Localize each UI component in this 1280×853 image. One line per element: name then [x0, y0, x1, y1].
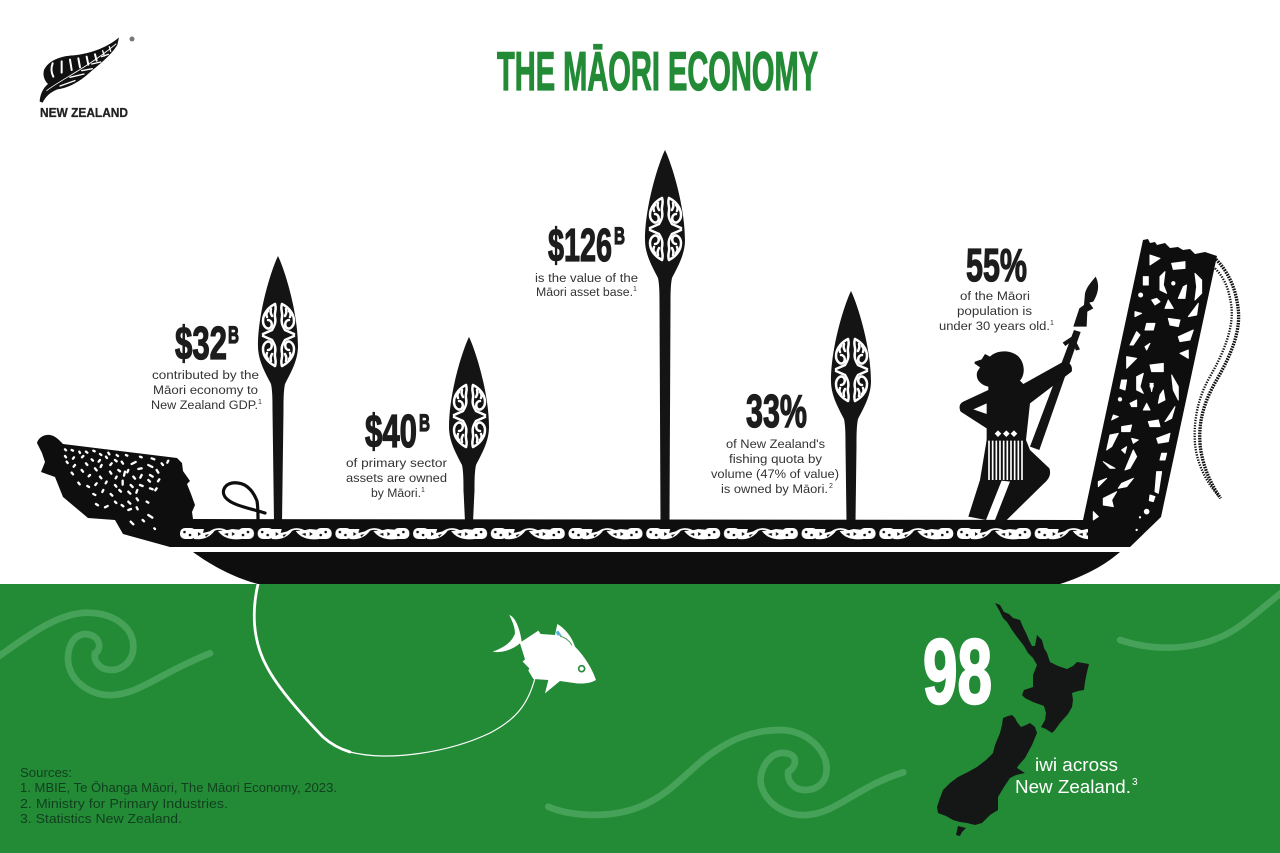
- rope loop: [223, 483, 265, 520]
- stat: $32B: New Zealand GDP.: [151, 398, 258, 412]
- stat: 55%: 1: [1050, 320, 1054, 327]
- stat: 33%: 2: [829, 483, 833, 490]
- sources: 2. Ministry for Primary Industries.: [20, 796, 228, 811]
- stat: $126B: B: [614, 223, 625, 250]
- stat: 33%: 33%: [746, 385, 807, 437]
- registered mark: [130, 36, 134, 42]
- icon: silver fern: [40, 37, 119, 103]
- paddle 2: [449, 337, 489, 522]
- icon: fish: [493, 615, 596, 693]
- stat: 33%: [711, 385, 839, 496]
- stat: 98 iwi: New Zealand.: [1015, 776, 1131, 797]
- title: THE MĀORI ECONOMY: [497, 40, 818, 102]
- sea swirl: right: [1120, 590, 1280, 648]
- stat: 33%: fishing quota by: [729, 452, 823, 466]
- stat: $40B: $40: [365, 405, 417, 457]
- stat: $32B: [151, 317, 262, 412]
- logo wordmark: NEW ZEALAND: [40, 106, 128, 120]
- stat: $40B: B: [419, 410, 430, 437]
- paddle 3: [645, 150, 685, 522]
- south island: [937, 715, 1037, 825]
- paddle 4: [831, 291, 871, 522]
- stat: 98 iwi: iwi across: [1035, 754, 1118, 775]
- spear: [1030, 277, 1098, 450]
- stat: 55%: 55%: [966, 239, 1027, 291]
- stat: $32B: Māori economy to: [153, 383, 258, 397]
- stat: $126B: is the value of the: [535, 271, 638, 285]
- stern carving: [1093, 255, 1202, 531]
- sources: Sources:: [20, 765, 72, 780]
- ornament band: [180, 527, 1088, 540]
- stern beads: [1195, 259, 1239, 498]
- sea background: [0, 584, 1280, 853]
- stat: $32B: $32: [175, 317, 227, 369]
- stat: $126B: [535, 219, 638, 299]
- arm gap: [973, 403, 987, 414]
- stat: 55%: population is: [957, 304, 1032, 318]
- hull lower body: [193, 552, 1120, 584]
- belt diamonds: [995, 430, 1017, 437]
- stat: 55%: of the Māori: [960, 289, 1030, 303]
- sea swirl: centre: [548, 730, 903, 815]
- map: New Zealand: [937, 603, 1089, 836]
- stat: $32B: 1: [258, 399, 262, 406]
- sources: 1. MBIE, Te Ōhanga Māori, The Māori Economy, 2023.: [20, 780, 337, 795]
- stat: $40B: by Māori.: [371, 486, 421, 500]
- north island: [995, 603, 1089, 733]
- stat: $32B: B: [228, 322, 239, 349]
- kaihoe figure: [960, 277, 1098, 524]
- stat: 98 iwi: 98: [923, 621, 992, 723]
- stat: 33%: of New Zealand's: [726, 437, 825, 451]
- skirt stripes: [987, 439, 1026, 481]
- stat: 33%: volume (47% of value): [711, 467, 839, 481]
- sources: [20, 765, 337, 826]
- stat: 98 iwi: 3: [1132, 777, 1138, 788]
- stat: $40B: assets are owned: [346, 471, 447, 485]
- sources: 3. Statistics New Zealand.: [20, 811, 182, 826]
- stat: $126B: $126: [548, 219, 612, 271]
- logo: New Zealand fern: [40, 36, 134, 120]
- hull upper body with prow and stern: [37, 239, 1217, 547]
- stat: $126B: 1: [633, 286, 637, 293]
- paddle 1: [258, 256, 298, 522]
- prow carving: [65, 449, 168, 529]
- stat: 55%: [939, 239, 1054, 333]
- fishing line: [254, 584, 535, 756]
- stat: $40B: of primary sector: [346, 456, 447, 470]
- stat: 33%: is owned by Māori.: [721, 482, 828, 496]
- sea swirl: left: [0, 613, 210, 695]
- stat: $32B: contributed by the: [152, 368, 259, 382]
- stat: $40B: 1: [421, 487, 425, 494]
- stat: $126B: Māori asset base.: [536, 285, 633, 299]
- stat: $40B: [346, 405, 447, 500]
- stat: 55%: under 30 years old.: [939, 319, 1050, 333]
- waka hull: [37, 239, 1239, 584]
- figure body: [960, 351, 1072, 524]
- stat: 98 iwi: [923, 621, 1138, 797]
- stewart island: [956, 826, 966, 836]
